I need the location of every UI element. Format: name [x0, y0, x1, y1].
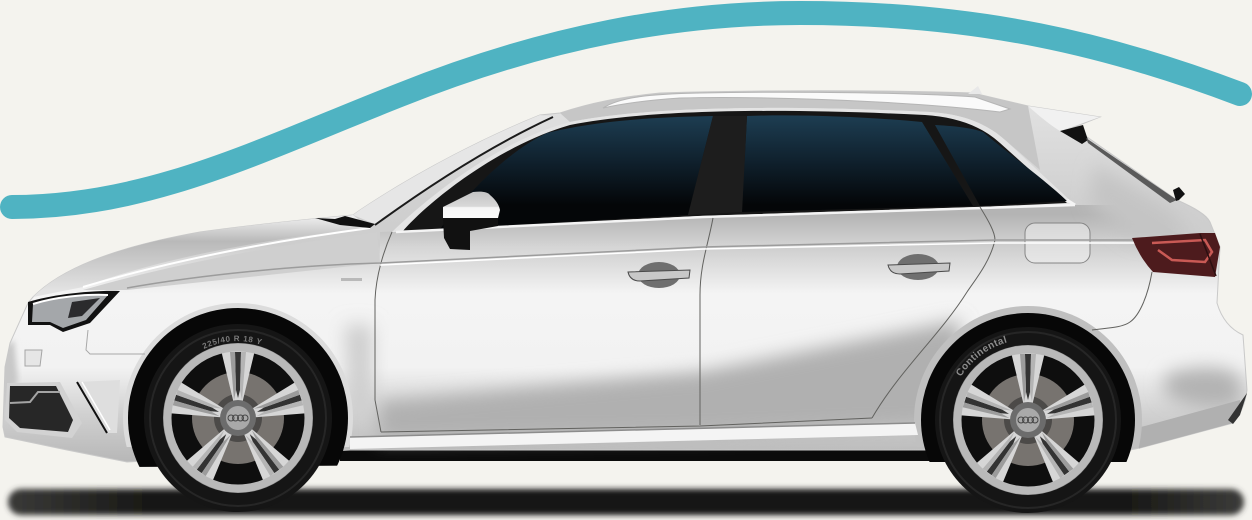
front door handle: [628, 262, 690, 288]
tyre lettering: 225/40 R 18 Y: [202, 336, 262, 349]
airflow curve: [12, 13, 1240, 207]
quarter window: [935, 125, 1067, 206]
badge: [341, 278, 362, 281]
mirror: [443, 192, 500, 250]
fog cover: [25, 350, 42, 366]
B pillar: [688, 116, 747, 215]
fuel flap: [1025, 223, 1090, 263]
rear glass edge: [1086, 138, 1177, 203]
ground shadow: [8, 489, 1244, 515]
rear wheel: [935, 327, 1121, 513]
roof fin: [968, 86, 982, 94]
belt chrome: [396, 205, 1075, 232]
body creases: [83, 228, 1135, 288]
car body: [3, 91, 1247, 462]
tyre brand: Continental: [956, 336, 1006, 376]
window surround: [403, 111, 1067, 231]
tail light: [1132, 233, 1220, 277]
wiper: [315, 216, 375, 228]
window frame: [392, 108, 1075, 232]
antenna: [1173, 187, 1185, 201]
spoiler: [1028, 106, 1100, 131]
roof rail: [603, 92, 1010, 112]
wheel arches: [921, 313, 1135, 462]
rear bumper diffuser: [1228, 393, 1247, 424]
sill: [350, 423, 918, 449]
front side window: [440, 116, 713, 229]
rear door handle: [888, 254, 950, 280]
front grille: [5, 382, 82, 438]
underbody: [340, 440, 940, 461]
rear side window: [742, 115, 973, 212]
windshield strip: [353, 115, 553, 224]
wheel arch lips: [123, 303, 1142, 447]
front wheel: [144, 324, 332, 512]
side vent: [77, 380, 120, 433]
headlight: [28, 291, 120, 332]
door shut lines: [86, 207, 1152, 432]
